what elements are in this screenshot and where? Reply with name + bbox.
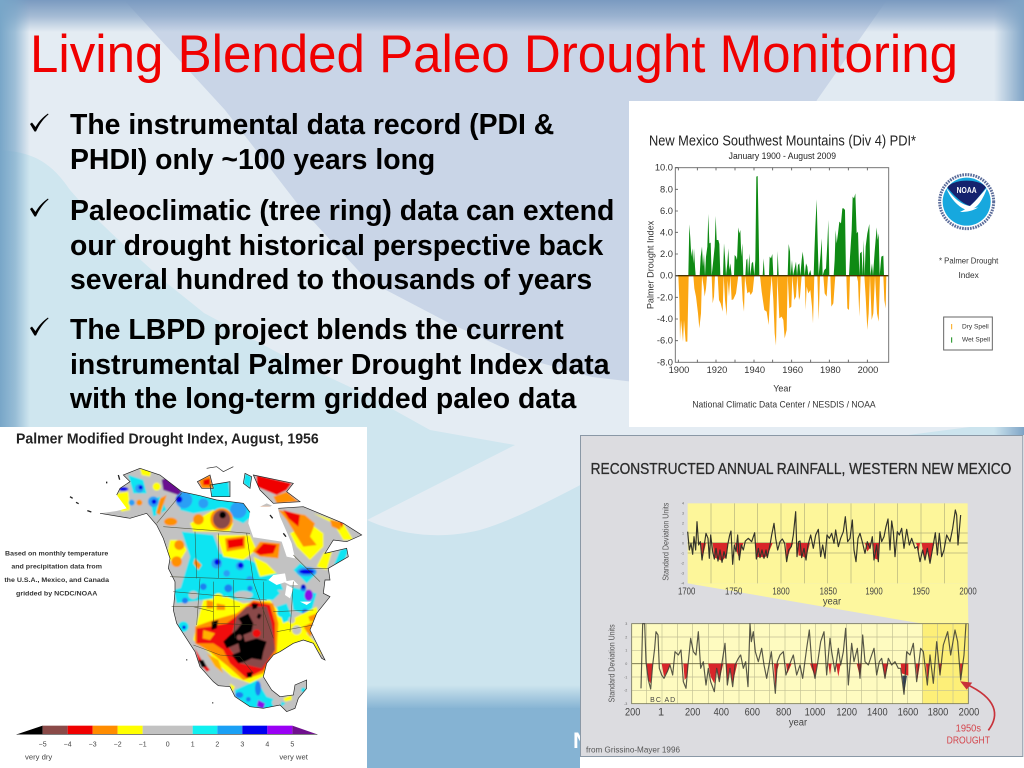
y axis labels: -6.0 [657, 336, 673, 346]
chart: 1700 to 2000 rainfall: 3 [682, 511, 684, 515]
map note: the U.S.A., Mexico, and Canada [4, 577, 110, 584]
bullet text 2: our drought historical perspective back [70, 230, 603, 262]
bullet text 3: with the long-term gridded paleo data [70, 383, 576, 415]
legend: dry and wet spell [944, 317, 992, 350]
x axis labels: 2000 [858, 365, 878, 375]
bullet text 1 [70, 109, 554, 176]
colour scale legend: 3 [240, 741, 244, 748]
chart: 1700 to 2000 rainfall: 2 [682, 521, 684, 525]
icon: NOAA logo [940, 175, 994, 229]
panel: Reconstructed annual rainfall [580, 435, 1024, 768]
x axis labels: 1920 [707, 365, 727, 375]
footnote: Palmer Drought Index [939, 255, 999, 280]
panel: New Mexico PDI chart [629, 101, 1024, 427]
colour scale legend [17, 726, 317, 762]
chart: 1700 to 2000 rainfall: 1950 [912, 586, 930, 597]
panel: Palmer Modified Drought Index map [0, 427, 367, 768]
y axis labels: -8.0 [657, 357, 673, 367]
chart: 1700 to 2000 rainfall: -2 [681, 562, 684, 566]
chart title: New Mexico Southwest Mountains (Div 4) PDI* [649, 133, 916, 149]
chart: 200 BC to 2000 AD rainfall: 800 [776, 706, 791, 718]
map: North America drought index [70, 458, 367, 718]
bullet text 1: PHDI) only ~100 years long [70, 144, 435, 176]
chart: 200 BC to 2000 AD rainfall: 600 [745, 706, 760, 718]
chart: 200 BC to 2000 AD rainfall: BC AD [650, 697, 675, 704]
x axis labels: 1940 [744, 365, 765, 375]
chart: 200 BC to 2000 AD rainfall: 200 [625, 706, 640, 718]
chart: 200 BC to 2000 AD rainfall: -1 [624, 675, 627, 679]
y axis labels: 10.0 [655, 163, 673, 173]
legend: dry and wet spell: Dry Spell [962, 324, 989, 331]
chart: 200 BC to 2000 AD rainfall: -2 [624, 689, 627, 693]
chart: 200 BC to 2000 AD rainfall: 200 [685, 706, 700, 718]
y axis labels [645, 163, 673, 367]
bullet text 2: Paleoclimatic (tree ring) data can extend [70, 195, 614, 227]
chart: 1700 to 2000 rainfall: -3 [681, 572, 684, 576]
map title: Palmer Modified Drought Index, August, 1956 [16, 432, 319, 448]
chart: 200 BC to 2000 AD rainfall: Standard Deviation Units [606, 624, 616, 702]
Canada and Alaska [117, 468, 353, 590]
source note: from Grissino-Mayer 1996 [586, 744, 680, 754]
chart: 200 BC to 2000 AD rainfall: 0 [625, 662, 627, 666]
footnote: Palmer Drought Index: Index [958, 270, 980, 280]
y axis labels: 6.0 [660, 206, 673, 216]
y axis labels: -2.0 [657, 292, 673, 302]
chart: 1700 to 2000 rainfall: 1900 [865, 586, 883, 597]
chart: 1700 to 2000 rainfall: 1700 [678, 586, 696, 597]
chart: 1700 to 2000 rainfall: -1 [681, 551, 684, 555]
x axis labels: 1980 [820, 365, 841, 375]
x axis labels: 1900 [669, 365, 689, 375]
arrow: points to 1950s drought [962, 682, 995, 730]
x axis labels [669, 365, 878, 409]
icon: check mark 3 [30, 318, 48, 336]
chart: 1700 to 2000 rainfall: 0 [682, 541, 684, 545]
bar chart: Palmer Drought Index [675, 168, 889, 362]
bullet text 1: The instrumental data record (PDI & [70, 109, 554, 141]
Hudson Bay and lakes [209, 503, 312, 688]
legend: dry and wet spell: Wet Spell [962, 337, 991, 344]
colour scale legend: 5 [290, 741, 294, 748]
colour scale legend: 0 [166, 741, 170, 748]
callout: 1950s drought [947, 723, 991, 746]
zoom connector [688, 583, 968, 624]
colour scale legend: very wet [279, 753, 309, 762]
bullet text 2 [70, 195, 614, 296]
chart: 1700 to 2000 rainfall: year [823, 597, 842, 608]
chart: 200 BC to 2000 AD rainfall: 400 [714, 706, 729, 718]
chart title [649, 133, 916, 161]
chart: 1700 to 2000 rainfall: 1800 [772, 586, 790, 597]
map note: gridded by NCDC/NOAA [16, 590, 98, 597]
y axis labels: Palmer Drought Index [645, 220, 655, 309]
chart: 200 BC to 2000 AD rainfall: -3 [624, 702, 627, 706]
colour scale legend: 1 [191, 741, 195, 748]
map note: Based on monthly temperature [5, 550, 109, 557]
colour scale legend: −5 [39, 741, 47, 748]
map note: and precipitation data from [11, 564, 102, 571]
callout: 1950s drought: DROUGHT [947, 735, 991, 746]
map note [4, 550, 110, 597]
chart: 200 BC to 2000 AD rainfall: 1 [658, 706, 664, 718]
chart: 1700 to 2000 rainfall: 4 [682, 501, 684, 505]
chart: 200 BC to 2000 AD rainfall: 1 [625, 649, 627, 653]
x axis labels: 1960 [782, 365, 803, 375]
colour scale legend: 2 [215, 741, 219, 748]
x axis labels: National Climatic Data Center / NESDIS / NOAA [692, 399, 876, 409]
colour scale legend: 4 [265, 741, 269, 748]
chart: 200 BC to 2000 AD rainfall: 1600 [898, 706, 918, 718]
y axis labels: -4.0 [657, 314, 673, 324]
bullet text 3 [70, 314, 610, 415]
chart: 1700 to 2000 rainfall: -4 [681, 582, 684, 586]
United States and Mexico [173, 580, 327, 712]
x axis labels: Year [773, 384, 791, 394]
chart: 200 BC to 2000 AD rainfall: 1200 [836, 706, 857, 718]
icon: check mark 1 [30, 114, 48, 132]
colour scale legend: −3 [89, 741, 97, 748]
chart: 200 BC to 2000 AD rainfall: 1000 [805, 706, 825, 718]
title: Living Blended Paleo Drought Monitoring [30, 25, 958, 84]
colour scale legend: −1 [139, 741, 147, 748]
colour scale legend: −4 [64, 741, 72, 748]
colour scale legend: −2 [114, 741, 122, 748]
chart: 200 BC to 2000 AD rainfall: 2 [625, 635, 627, 639]
bullet text 2: several hundred to thousands of years [70, 264, 592, 296]
chart: 200 BC to 2000 AD rainfall: year [789, 717, 808, 728]
chart: 1700 to 2000 rainfall: 1750 [725, 586, 743, 597]
y axis labels: 4.0 [660, 227, 673, 237]
chart: 1700 to 2000 rainfall [661, 501, 977, 608]
callout: 1950s drought: 1950s [956, 723, 981, 734]
y axis labels: 0.0 [660, 271, 673, 281]
bullet text 3: instrumental Palmer Drought Index data [70, 349, 610, 381]
chart: 1700 to 2000 rainfall: 1 [682, 531, 684, 535]
bullet text 3: The LBPD project blends the current [70, 314, 564, 346]
chart: 1700 to 2000 rainfall: 1850 [820, 586, 837, 597]
chart: 200 BC to 2000 AD rainfall: 1400 [867, 706, 888, 718]
y axis labels: 8.0 [660, 184, 673, 194]
chart: 1700 to 2000 rainfall: 2000 [959, 586, 977, 597]
chart title: January 1900 - August 2009 [729, 151, 836, 161]
chart: 200 BC to 2000 AD rainfall: 1800 [928, 706, 948, 718]
chart: 200 BC to 2000 AD rainfall: 2000 [959, 706, 979, 718]
chart: 200 BC to 2000 AD rainfall: 3 [625, 622, 627, 626]
borders [157, 493, 328, 673]
chart: 1700 to 2000 rainfall: Standard Deviation Units [661, 502, 671, 581]
y axis labels: 2.0 [660, 249, 673, 259]
icon: NOAA logo: NOAA [957, 185, 977, 195]
chart: 200 BC to 2000 AD rainfall [606, 622, 979, 728]
icon: check mark 2 [30, 198, 48, 216]
footnote: Palmer Drought Index: * Palmer Drought [939, 255, 999, 265]
colour scale legend: very dry [25, 753, 52, 762]
